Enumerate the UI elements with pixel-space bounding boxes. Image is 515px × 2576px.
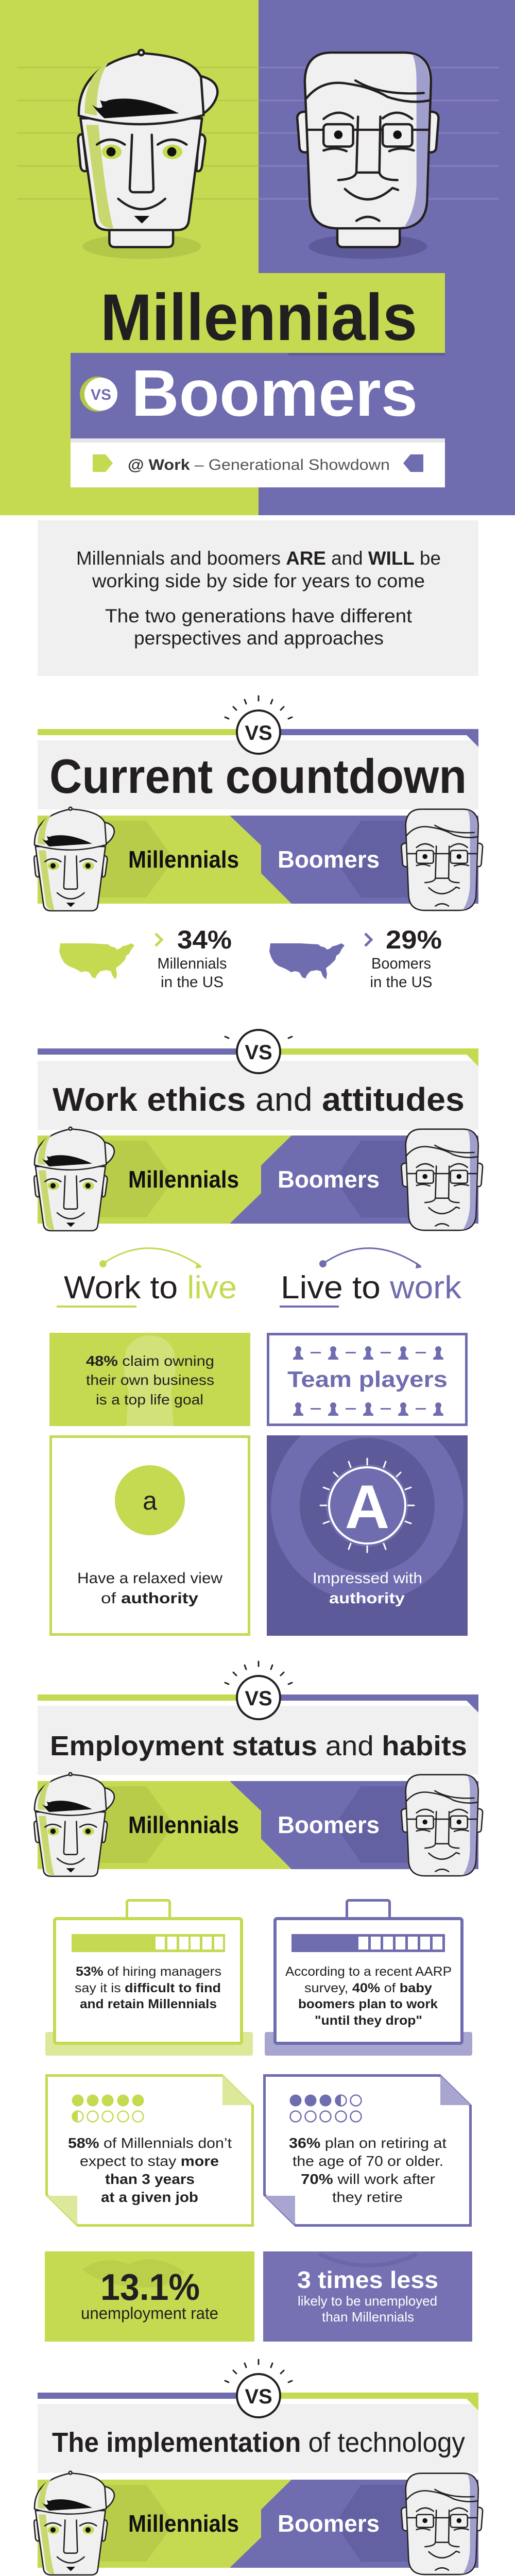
header illustration: millennial face — [78, 50, 217, 259]
title: Millennials: Millennials — [100, 281, 417, 354]
briefcase: 40% work until they drop: boomers plan to work — [298, 1997, 438, 2011]
versus bar: work ethics: Millennials — [128, 1166, 239, 1193]
versus bar: current countdown: Boomers — [278, 846, 380, 873]
stat box: 13.1% unemployment: 13.1% — [100, 2267, 200, 2308]
briefcase: 40% work until they drop: According to a recent AARP — [285, 1964, 452, 1979]
stat: 29% boomers: 29% — [386, 925, 442, 954]
title band: vs Boomers: VS — [91, 386, 111, 403]
stat: 34% millennials — [59, 925, 232, 991]
note card: 58% millennials: 58% of Millennials don’t — [68, 2135, 232, 2151]
versus bar: work ethics: Boomers — [278, 1166, 380, 1193]
icon: VS badge: VS — [245, 2385, 272, 2408]
panel: 48% own business: is a top life goal — [96, 1392, 203, 1408]
subtitle banner: @ Work – Generational Showdown — [128, 456, 390, 473]
panel: team players — [268, 1334, 467, 1425]
stat: 29% boomers: Boomers — [371, 955, 431, 972]
stat box: 3 times less: likely to be unemployed — [298, 2293, 437, 2309]
title band: vs Boomers: Boomers — [131, 357, 418, 430]
note card: 58% millennials: at a given job — [101, 2189, 198, 2205]
icon: VS badge — [225, 1030, 292, 1073]
section heading: Employment status and habits — [38, 1662, 478, 1775]
panel: impressed with authority — [267, 1435, 468, 1636]
icon: small a — [115, 1465, 185, 1535]
stat box: 13.1% unemployment: unemployment rate — [81, 2304, 218, 2323]
note card: 36% retiring — [265, 2075, 471, 2226]
versus bar: employment: Millennials — [128, 1811, 239, 1838]
panel: impressed with authority: authority — [329, 1590, 405, 1607]
panel: relaxed view of authority — [50, 1436, 249, 1634]
heading: Live to work — [280, 1248, 462, 1308]
stat: 34% millennials: Millennials — [158, 955, 227, 972]
panel: impressed with authority: A — [345, 1472, 389, 1541]
stat: 34% millennials: in the US — [161, 974, 224, 991]
heading: Work to live — [57, 1248, 237, 1308]
stat: 29% boomers: in the US — [370, 974, 433, 991]
stat box: 3 times less — [263, 2251, 472, 2342]
briefcase: 53% hiring managers: 53% of hiring managers — [76, 1964, 221, 1979]
subtitle banner — [71, 438, 445, 487]
icon: VS badge — [225, 1662, 292, 1719]
heading: Live to work: Live to work — [281, 1270, 462, 1306]
versus bar: current countdown: Millennials — [128, 846, 239, 873]
note card: 58% millennials: than 3 years — [105, 2171, 195, 2187]
briefcase: 40% work until they drop: "until they drop" — [315, 2013, 422, 2028]
intro text panel — [38, 520, 478, 676]
icon: VS badge — [225, 696, 292, 754]
icon: VS badge — [225, 2360, 292, 2417]
versus bar: work ethics — [34, 1127, 483, 1231]
header illustration: boomer face — [297, 53, 438, 259]
title band: vs Boomers — [71, 353, 445, 438]
section heading: Current countdown: Current countdown — [49, 749, 467, 803]
versus bar: technology — [34, 2471, 483, 2575]
stat box: 3 times less: than Millennials — [322, 2309, 414, 2325]
icon: VS badge: VS — [245, 1687, 272, 1710]
section heading: Current countdown — [38, 696, 478, 809]
stat box: 3 times less: 3 times less — [297, 2266, 438, 2293]
intro text panel: The two generations have different — [105, 605, 413, 626]
section heading: Work ethics and attitudes — [38, 1030, 478, 1130]
versus bar: current countdown — [34, 807, 483, 911]
stat: 34% millennials: 34% — [177, 925, 232, 954]
icon: VS badge: VS — [245, 722, 272, 744]
section heading: Employment status and habits: Employment status and habits — [50, 1731, 467, 1761]
briefcase: 40% work until they drop: survey, 40% of baby — [304, 1981, 432, 1995]
note card: 36% retiring: 36% plan on retiring at — [289, 2135, 447, 2151]
section heading: The implementation of technology: The implementation of technology — [52, 2427, 465, 2458]
briefcase: 53% hiring managers: say it is difficult to find — [75, 1981, 221, 1995]
versus bar: employment: Boomers — [278, 1811, 380, 1838]
stat box: 13.1% unemployment — [45, 2251, 254, 2342]
intro text panel: working side by side for years to come — [92, 570, 425, 591]
note card: 36% retiring: 70% will work after — [301, 2171, 435, 2187]
versus bar: employment — [34, 1773, 483, 1876]
heading: Work to live: Work to live — [64, 1270, 237, 1306]
versus bar: technology: Boomers — [278, 2510, 380, 2537]
panel: team players: Team players — [287, 1367, 448, 1392]
note card: 58% millennials: expect to stay more — [80, 2153, 219, 2169]
versus bar: technology: Millennials — [128, 2510, 239, 2537]
panel: relaxed view of authority: of authority — [101, 1590, 198, 1607]
header — [0, 0, 515, 515]
stat: 29% boomers — [269, 925, 442, 991]
panel: impressed with authority: Impressed with — [313, 1570, 422, 1587]
section heading: Work ethics and attitudes: Work ethics and attitudes — [53, 1081, 465, 1118]
panel: 48% own business: 48% claim owning — [86, 1353, 214, 1369]
briefcase: 53% hiring managers: and retain Millennials — [80, 1997, 217, 2011]
intro text panel: Millennials and boomers ARE and WILL be — [76, 548, 441, 569]
panel: 48% own business: their own business — [86, 1372, 214, 1388]
panel: relaxed view of authority: Have a relaxed view — [77, 1570, 222, 1587]
icon: VS badge: VS — [245, 1041, 272, 1064]
intro text panel: perspectives and approaches — [134, 628, 384, 649]
panel: 48% own business — [49, 1333, 250, 1426]
panel: relaxed view of authority: a — [143, 1486, 157, 1515]
note card: 58% millennials — [46, 2075, 253, 2226]
section heading: The implementation of technology — [38, 2360, 478, 2473]
briefcase: 40% work until they drop — [265, 1900, 472, 2056]
briefcase: 53% hiring managers — [45, 1900, 253, 2056]
note card: 36% retiring: they retire — [332, 2189, 403, 2205]
note card: 36% retiring: the age of 70 or older. — [293, 2153, 443, 2169]
